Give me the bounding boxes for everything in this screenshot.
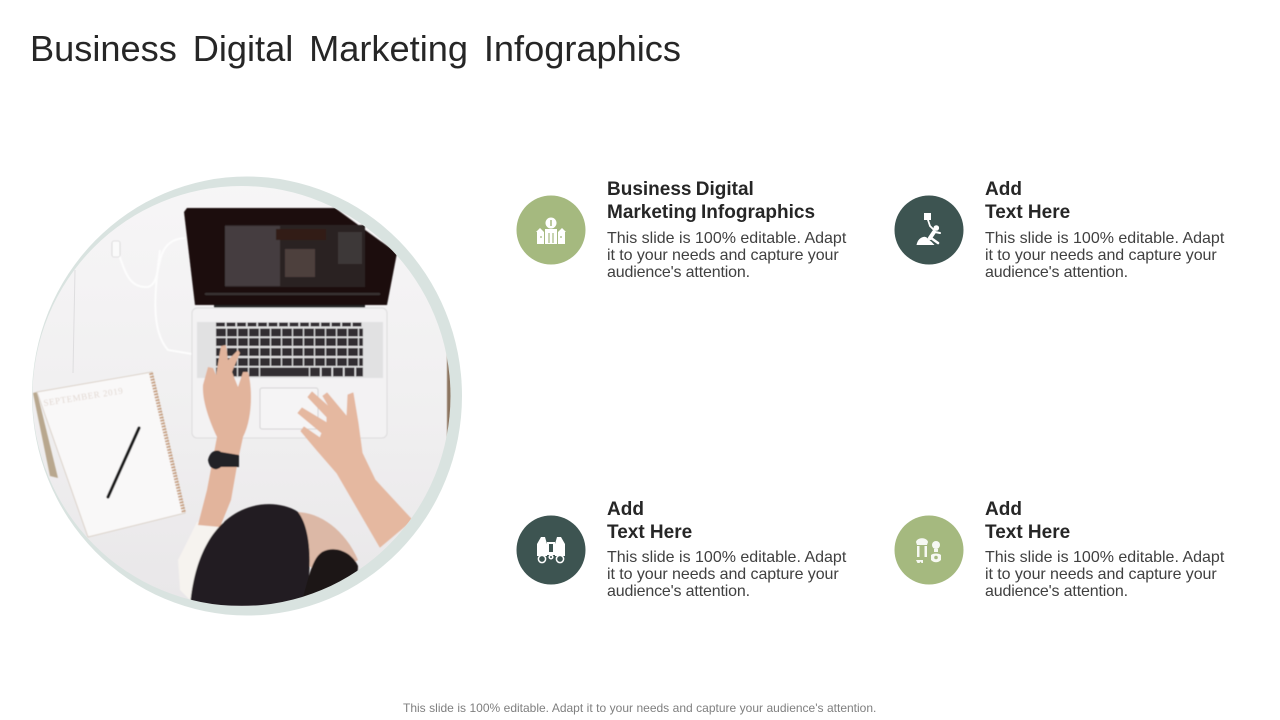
keyboard — [216, 324, 363, 372]
footer note: This slide is 100% editable. Adapt it to your needs and capture your audience's attention. — [403, 701, 876, 715]
body text — [607, 230, 846, 281]
title: Business Digital Marketing Infographics — [30, 28, 681, 69]
shirt — [178, 522, 225, 606]
trackpad — [260, 388, 318, 429]
notebook — [37, 372, 185, 537]
photo ring — [32, 176, 462, 616]
body text: audience's attention. — [607, 583, 750, 600]
icon: climber with flag — [894, 196, 964, 264]
heading: Add — [985, 179, 1022, 200]
body text — [607, 549, 846, 600]
right arm and hand — [298, 392, 412, 547]
heading: Business Digital — [607, 179, 754, 200]
heading: Marketing Infographics — [607, 202, 815, 223]
panel: bottom left item — [516, 499, 846, 600]
body text: it to your needs and capture your — [607, 566, 839, 583]
body text: it to your needs and capture your — [607, 247, 839, 264]
scalp and neck — [298, 511, 358, 568]
body text: This slide is 100% editable. Adapt — [607, 230, 846, 247]
heading: Text Here — [985, 522, 1070, 543]
body text: This slide is 100% editable. Adapt — [985, 230, 1224, 247]
hair — [190, 504, 310, 606]
body text: it to your needs and capture your — [985, 247, 1217, 264]
heading: Add — [607, 499, 644, 520]
photo scene — [32, 186, 450, 606]
laptop base — [192, 308, 387, 438]
body text: audience's attention. — [985, 264, 1128, 281]
pen — [108, 428, 139, 497]
heading: Add — [985, 499, 1022, 520]
heading: Text Here — [607, 522, 692, 543]
body text: audience's attention. — [607, 264, 750, 281]
icon: bank building with dollar — [516, 196, 586, 264]
body text: This slide is 100% editable. Adapt — [607, 549, 846, 566]
panel: bottom right item — [894, 499, 1224, 600]
body text: audience's attention. — [985, 583, 1128, 600]
heading — [985, 179, 1070, 223]
heading — [607, 499, 692, 543]
cable — [118, 238, 192, 354]
panel: top left item — [516, 179, 846, 281]
notebook heading: SEPTEMBER 2019 — [43, 385, 124, 408]
circular photo of person at laptop — [32, 176, 462, 616]
icon: lightbulb and idea tools — [894, 516, 964, 584]
icon: binoculars — [516, 516, 586, 584]
watch — [208, 451, 239, 469]
left arm and hand — [198, 345, 251, 527]
body text: This slide is 100% editable. Adapt — [985, 549, 1224, 566]
wood edges — [447, 350, 453, 445]
laptop screen — [184, 208, 397, 305]
body text — [985, 549, 1224, 600]
heading — [607, 179, 815, 223]
body text — [985, 230, 1224, 281]
body text: it to your needs and capture your — [985, 566, 1217, 583]
heading: Text Here — [985, 202, 1070, 223]
heading — [985, 499, 1070, 543]
panel: top right item — [894, 179, 1224, 281]
